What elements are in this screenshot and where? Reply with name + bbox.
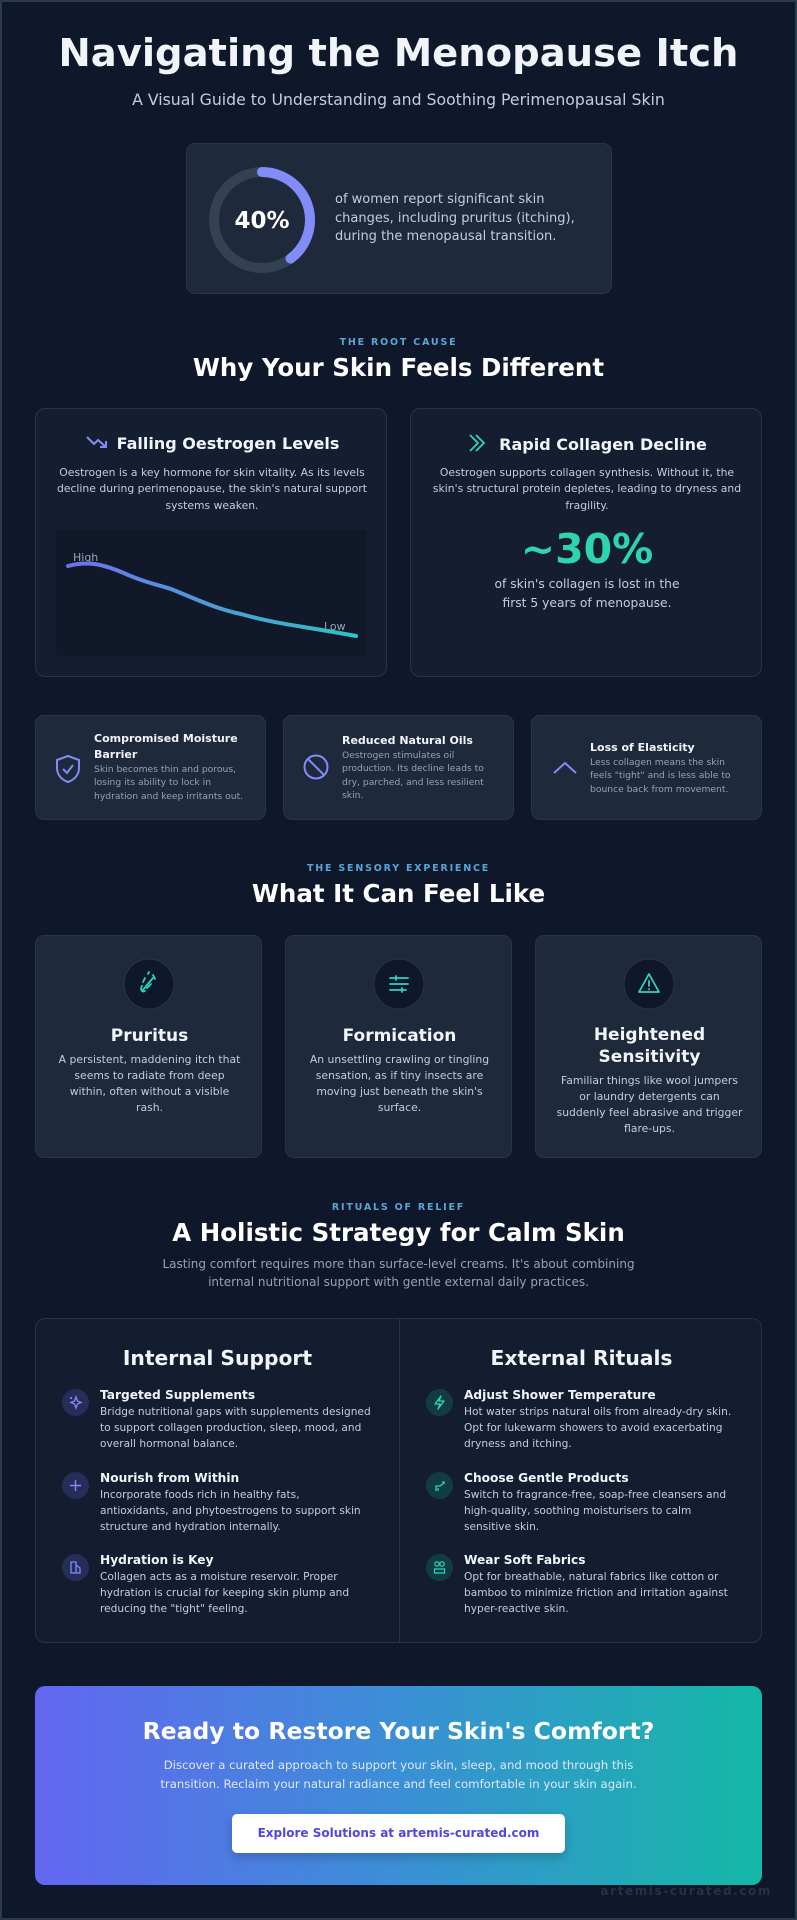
desc (58, 1053, 240, 1114)
title: Formication (343, 1026, 456, 1046)
panel: natural oils (283, 715, 514, 820)
item: hydration: Collagen acts as a moisture reservoir. Proper (100, 1571, 338, 1583)
text: Loss of Elasticity (590, 741, 695, 754)
text: feels "tight" and is less able to (590, 770, 731, 781)
intro text: internal nutritional support with gentle external daily practices. (208, 1275, 589, 1289)
stat caption: of skin's collagen is lost in the (494, 577, 680, 591)
stat caption (494, 577, 680, 610)
item: nourish: structure and hydration internally. (100, 1521, 281, 1533)
CTA banner (35, 1686, 762, 1885)
text (94, 732, 243, 802)
stat card (186, 143, 612, 294)
item: fabrics (426, 1553, 728, 1615)
item: shower: Adjust Shower Temperature (464, 1388, 656, 1402)
title: Pruritus (111, 1026, 188, 1046)
eyebrow: sensory: THE SENSORY EXPERIENCE (307, 863, 490, 874)
heading: holistic: A Holistic Strategy for Calm Skin (172, 1218, 625, 1247)
text: bounce back from movement. (590, 784, 728, 795)
desc (310, 1053, 489, 1114)
title (594, 1025, 705, 1067)
card: formication (285, 935, 512, 1158)
item: products: Choose Gentle Products (464, 1471, 629, 1485)
card title with icon: Falling Oestrogen Levels (117, 434, 339, 453)
item: fabrics: Opt for breathable, natural fabrics like cotton or (464, 1571, 718, 1583)
desc: sensation, as if tiny insects are (316, 1069, 483, 1082)
intro text (162, 1257, 635, 1289)
item: shower: Opt for lukewarm showers to avoid exacerbating (464, 1422, 722, 1434)
desc: or laundry detergents can (579, 1090, 720, 1103)
text: Reduced Natural Oils (342, 734, 473, 747)
column: external rituals (426, 1346, 731, 1615)
desc: An unsettling crawling or tingling (310, 1053, 489, 1066)
text: Skin becomes thin and porous, (94, 764, 236, 775)
desc (557, 1074, 742, 1135)
heading: Internal Support (123, 1346, 312, 1370)
stat text: during the menopausal transition. (335, 229, 556, 244)
panel: falling oestrogen (35, 408, 387, 677)
stat caption: first 5 years of menopause. (502, 596, 672, 610)
title: Navigating the Menopause Itch (59, 31, 738, 76)
CTA text: Discover a curated approach to support your skin, sleep, and mood through this (164, 1758, 633, 1772)
desc: surface. (378, 1101, 421, 1114)
panel: moisture barrier (35, 715, 266, 820)
item: hydration: reducing the "tight" feeling. (100, 1603, 248, 1615)
card: sensitivity (535, 935, 762, 1158)
item: hydration: Hydration is Key (100, 1553, 214, 1567)
line chart: Low (324, 620, 346, 633)
title: Heightened (594, 1025, 705, 1045)
subtitle: A Visual Guide to Understanding and Soothing Perimenopausal Skin (132, 90, 665, 109)
icon: sliders (374, 958, 424, 1010)
description: skin's structural protein depletes, leading to dryness and (433, 482, 741, 495)
text (590, 741, 731, 795)
item: fabrics: hyper-reactive skin. (464, 1603, 569, 1615)
desc: suddenly feel abrasive and trigger (557, 1106, 742, 1119)
description: Oestrogen is a key hormone for skin vitality. As its levels (59, 466, 365, 479)
item: supplements (62, 1388, 371, 1450)
intro text: Lasting comfort requires more than surface-level creams. It's about combining (162, 1257, 635, 1271)
item: nourish: antioxidants, and phytoestrogens to support skin (100, 1505, 361, 1517)
icon: chevron up (553, 762, 577, 774)
stat text: changes, including pruritus (itching), (335, 210, 575, 226)
eyebrow: root cause: THE ROOT CAUSE (340, 337, 457, 348)
desc: seems to radiate from deep (74, 1069, 225, 1082)
item: products: Switch to fragrance-free, soap-free cleansers and (464, 1489, 726, 1501)
item: supplements: overall hormonal balance. (100, 1438, 238, 1450)
text: skin. (342, 790, 363, 801)
item: shower (426, 1388, 731, 1450)
description: Oestrogen supports collagen synthesis. Without it, the (440, 466, 734, 479)
description (433, 466, 741, 512)
item: products: high-quality, soothing moisturisers to calm (464, 1505, 691, 1517)
text: Compromised Moisture (94, 732, 238, 745)
heading: External Rituals (491, 1346, 672, 1370)
desc: moving just beneath the skin's (316, 1085, 483, 1098)
panel: elasticity (531, 715, 762, 820)
item: products: sensitive skin. (464, 1521, 539, 1533)
text: production. Its decline leads to (342, 763, 484, 774)
text: dry, parched, and less resilient (342, 777, 484, 788)
item: hydration: hydration is crucial for keeping skin plump and (100, 1587, 349, 1599)
description: systems weaken. (166, 499, 258, 512)
desc: A persistent, maddening itch that (59, 1053, 240, 1066)
text: Oestrogen stimulates oil (342, 750, 454, 761)
text: losing its ability to lock in (94, 777, 211, 788)
item: nourish: Nourish from Within (100, 1471, 239, 1485)
CTA text (160, 1758, 637, 1790)
item: supplements: Targeted Supplements (100, 1388, 255, 1402)
column: internal support (62, 1346, 371, 1615)
heading: why: Why Your Skin Feels Different (193, 353, 604, 382)
heading: feel like: What It Can Feel Like (252, 879, 545, 908)
icon: ban (304, 754, 328, 780)
card: pruritus (35, 935, 262, 1158)
desc: Familiar things like wool jumpers (561, 1074, 738, 1087)
text: hydration and keep irritants out. (94, 791, 243, 802)
text: Less collagen means the skin (590, 757, 725, 768)
item: nourish (62, 1471, 361, 1533)
item: nourish: Incorporate foods rich in healthy fats, (100, 1489, 300, 1501)
desc: within, often without a visible (70, 1085, 229, 1098)
card title with icon: Rapid Collagen Decline (499, 435, 707, 454)
icon: itch (124, 958, 174, 1010)
item: hydration (62, 1553, 349, 1615)
CTA heading: Ready to Restore Your Skin's Comfort? (143, 1717, 654, 1745)
stat text: of women report significant skin (335, 192, 545, 207)
desc: flare-ups. (624, 1122, 675, 1135)
desc: rash. (136, 1101, 163, 1114)
stat text (335, 192, 575, 244)
icon: shield (56, 754, 80, 783)
donut chart 40%: 40% (234, 208, 290, 234)
footer watermark: artemis-curated.com (600, 1884, 772, 1898)
divider (399, 1319, 400, 1642)
text (342, 734, 484, 801)
big stat: ~30% (521, 525, 653, 573)
CTA button (232, 1814, 565, 1853)
item: shower: Hot water strips natural oils from already-dry skin. (464, 1406, 731, 1418)
icon: warning (624, 958, 674, 1010)
description: fragility. (565, 499, 609, 512)
item: shower: dryness and itching. (464, 1438, 572, 1450)
CTA text: transition. Reclaim your natural radiance and feel comfortable in your skin again. (160, 1776, 637, 1790)
item: products (426, 1471, 726, 1533)
item: fabrics: Wear Soft Fabrics (464, 1553, 586, 1567)
CTA button: Explore Solutions at artemis-curated.com (258, 1826, 539, 1840)
item: supplements: Bridge nutritional gaps with supplements designed (100, 1406, 371, 1418)
description: decline during perimenopause, the skin's natural support (57, 482, 367, 495)
item: supplements: to support collagen production, sleep, mood, and (100, 1422, 361, 1434)
item: fabrics: bamboo to minimize friction and irritation against (464, 1587, 728, 1599)
panel: collagen decline (410, 408, 762, 677)
donut chart 40% (209, 167, 315, 273)
line chart: High (73, 551, 98, 564)
text: Barrier (94, 748, 137, 761)
description (57, 466, 367, 512)
title: Sensitivity (599, 1047, 700, 1067)
panel: strategy (35, 1318, 762, 1643)
eyebrow: rituals: RITUALS OF RELIEF (332, 1202, 465, 1213)
line chart (56, 529, 366, 656)
